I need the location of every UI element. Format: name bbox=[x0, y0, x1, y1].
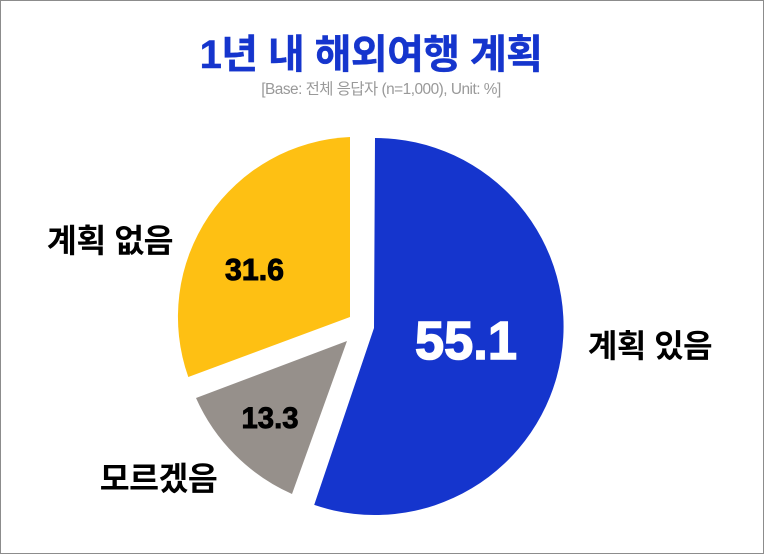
subtitle: base note: [Base: 전체 응답자 (n=1,000), Unit: %] bbox=[261, 80, 501, 98]
pie chart bbox=[178, 137, 564, 515]
slice: unknown 13.3 bbox=[196, 341, 347, 494]
label: no plan: 계획 없음 bbox=[47, 223, 173, 259]
slice: no plan 31.6 bbox=[178, 137, 350, 377]
title: 1년 내 해외여행 계획 bbox=[200, 33, 542, 77]
label: planned: 계획 있음 bbox=[588, 328, 712, 364]
value: 55.1: 55.1 bbox=[415, 311, 517, 371]
value: 31.6: 31.6 bbox=[225, 252, 284, 287]
slice: planned 55.1 bbox=[314, 138, 564, 515]
value: 13.3: 13.3 bbox=[242, 402, 298, 435]
label: unknown: 모르겠음 bbox=[100, 461, 217, 497]
